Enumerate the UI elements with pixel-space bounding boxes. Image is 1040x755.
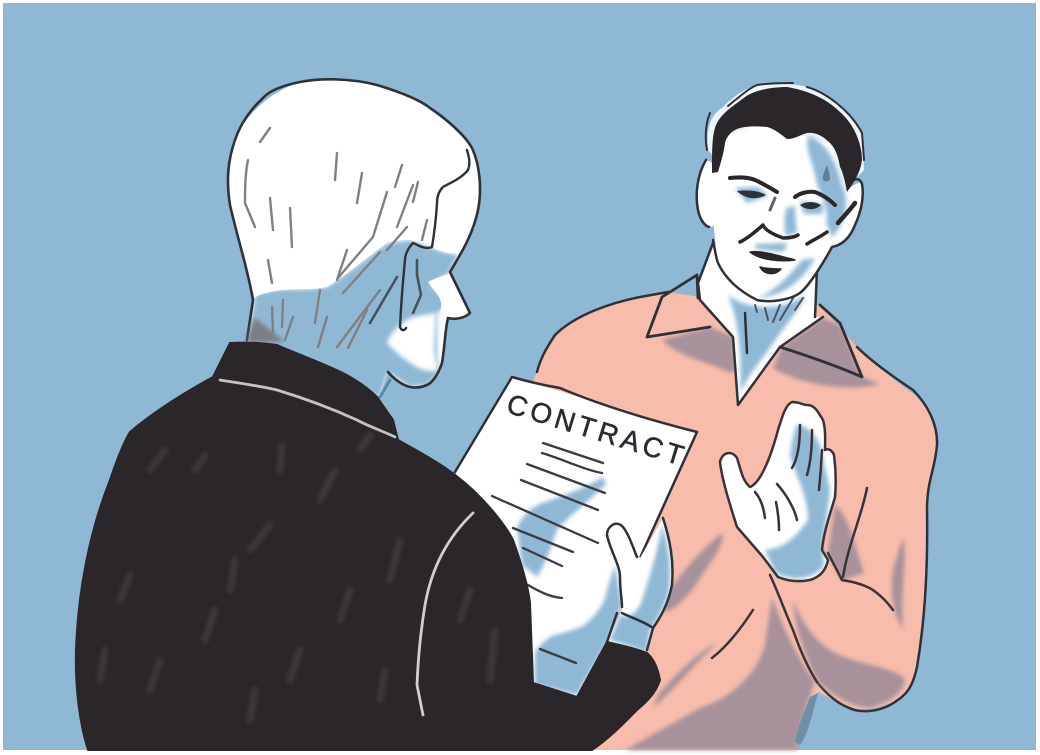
pink shirt body — [500, 292, 937, 750]
paper shadow lower — [535, 565, 622, 695]
left collar — [647, 275, 710, 337]
white nose — [428, 274, 468, 318]
hand shading — [765, 425, 830, 578]
white rim around hair — [708, 84, 864, 190]
forearm shadow — [793, 600, 905, 708]
face shading — [735, 136, 846, 298]
paper shadow upper — [517, 477, 606, 577]
heading: CONTRACT: CONTRACT — [503, 388, 687, 471]
shirt outline: left shoulder — [537, 292, 668, 372]
hair — [712, 87, 862, 192]
chin blue line — [380, 380, 390, 397]
jacket sleeve seam — [417, 513, 473, 715]
cheek and ear hatching — [807, 232, 827, 244]
hair highlight outline — [706, 83, 864, 160]
jacket texture — [100, 435, 495, 720]
figure: right man in pink shirt — [500, 83, 937, 750]
sweat drop — [823, 165, 830, 181]
raised hand — [720, 402, 836, 581]
left ear — [697, 160, 709, 227]
neck and chest skin — [698, 243, 823, 405]
hand fill — [607, 518, 673, 655]
eye shadows — [735, 187, 768, 203]
jacket collar seam — [220, 380, 395, 437]
neck shading — [728, 295, 805, 392]
dark fold below elbow — [795, 693, 818, 745]
paper outline — [455, 377, 697, 558]
hand outline — [720, 402, 836, 581]
contract text lines — [492, 443, 605, 663]
face and neck shading — [247, 240, 458, 397]
inner ear and stray lines — [370, 260, 421, 323]
head and neck skin — [247, 180, 475, 397]
large shadow under arm — [625, 597, 815, 750]
hand shading — [610, 525, 670, 652]
collar shadow right — [773, 318, 880, 387]
eyes — [737, 190, 821, 209]
white chin — [387, 313, 438, 371]
stripe across chest — [662, 533, 722, 612]
paper sheet — [455, 377, 697, 697]
finger and palm lines — [755, 425, 822, 530]
lower chest stripe — [653, 642, 717, 708]
chin shadow — [758, 258, 815, 298]
shirt shadows — [625, 318, 905, 750]
head skin — [712, 125, 862, 301]
black jacket — [76, 343, 660, 750]
under nose — [755, 243, 788, 252]
neck smudge — [247, 318, 285, 342]
head outline — [228, 79, 480, 388]
elbow sliver — [892, 537, 905, 630]
nose — [770, 198, 775, 210]
hand silhouette — [720, 402, 836, 581]
collar shadow left — [662, 327, 736, 372]
neck hatching — [755, 295, 803, 322]
contract document — [455, 377, 697, 697]
temple and ear line — [400, 150, 469, 330]
arm fold lines — [712, 488, 893, 682]
left ear skin — [697, 160, 720, 227]
right collar — [780, 305, 862, 377]
white hair — [228, 79, 480, 298]
mouth — [750, 252, 795, 274]
shirt outline: right shoulder and arm — [817, 347, 937, 711]
figure: left man from behind — [76, 79, 673, 750]
hair strands — [245, 128, 427, 348]
shadow behind hand — [828, 505, 864, 580]
neck outline — [698, 243, 823, 405]
hand outline — [607, 518, 673, 650]
nose shadow — [784, 206, 797, 236]
eyebrows — [730, 177, 835, 205]
forehead and cheek shadow — [807, 136, 846, 238]
holding hand — [607, 518, 673, 655]
head outline — [713, 179, 863, 301]
